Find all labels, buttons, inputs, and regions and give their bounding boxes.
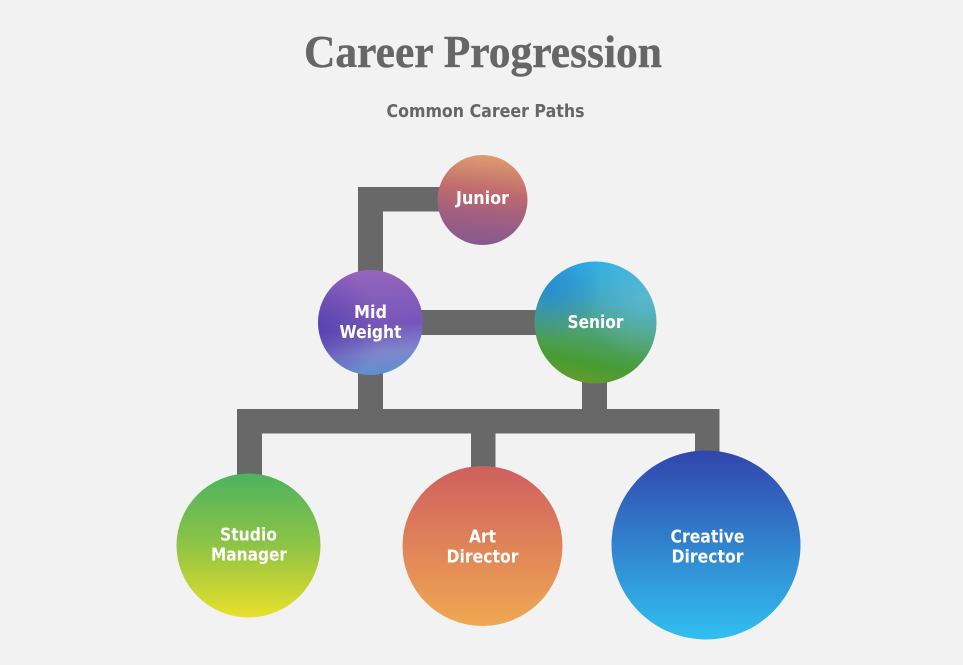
node: Senior <box>534 262 656 384</box>
node: Mid Weight: Weight <box>340 323 402 343</box>
node: Art Director: Art <box>469 528 496 548</box>
node: Creative Director: Creative <box>670 528 745 548</box>
node: Studio Manager: Studio <box>220 526 277 546</box>
node: Creative Director: Director <box>672 548 744 568</box>
node: Mid Weight <box>318 270 423 375</box>
node: Senior: Senior <box>568 313 624 333</box>
node: Studio Manager <box>176 474 320 618</box>
node: Junior <box>438 155 528 245</box>
node: Junior: Junior <box>455 189 509 209</box>
node: Studio Manager: Manager <box>211 546 287 566</box>
node: Mid Weight: Mid <box>354 303 387 323</box>
node: Art Director: Director <box>446 548 519 568</box>
title: Career Progression <box>304 26 662 77</box>
node: Creative Director <box>612 450 800 640</box>
node: Art Director <box>402 466 562 626</box>
subtitle: Common Career Paths <box>386 101 584 122</box>
connector lines <box>237 187 720 484</box>
